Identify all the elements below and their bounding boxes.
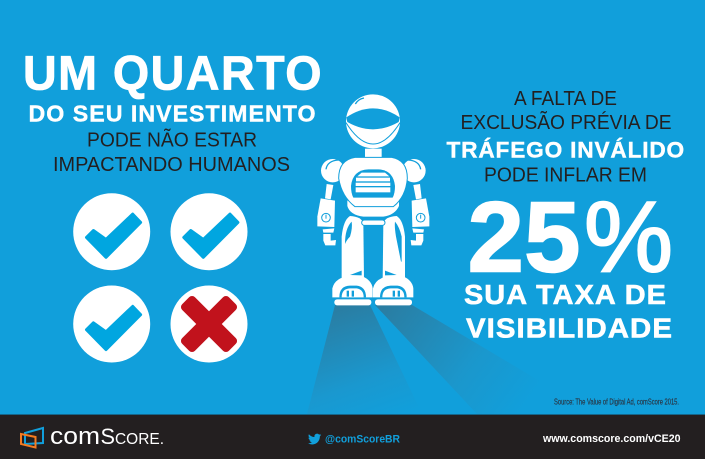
robot illustration <box>317 94 429 305</box>
icon: check 2 <box>170 193 248 270</box>
text: visibilidade: VISIBILIDADE <box>466 313 673 344</box>
website url: www.comscore.com/vCE20 <box>542 433 680 445</box>
twitter handle: @comScoreBR <box>325 434 400 446</box>
big number: 25 percent: % <box>584 182 673 294</box>
icon: check 1 <box>73 193 150 270</box>
icon: red cross <box>170 286 248 362</box>
text: exclusao previa de: EXCLUSÃO PRÉVIA DE <box>460 110 672 134</box>
logo: comscore wordmark: com <box>50 423 100 450</box>
highlight: trafego invalido: TRÁFEGO INVÁLIDO <box>446 138 685 163</box>
text: a falta de: A FALTA DE <box>514 88 617 110</box>
robot right arm <box>402 159 429 245</box>
robot right foot <box>373 276 413 305</box>
robot torso <box>339 157 407 207</box>
logo: comscore wordmark: S <box>100 424 115 449</box>
headline block <box>23 48 323 176</box>
robot left arm <box>317 159 344 245</box>
right text block <box>446 88 685 344</box>
logo: comscore wordmark <box>50 423 164 450</box>
text: impactando humanos: IMPACTANDO HUMANOS <box>53 154 290 176</box>
robot head <box>346 94 400 157</box>
text: pode inflar em: PODE INFLAR EM <box>484 165 647 187</box>
subtitle: do seu investimento: DO SEU INVESTIMENTO <box>28 101 316 127</box>
icon: check 3 <box>73 286 150 362</box>
logo: comscore wordmark: CORE. <box>115 431 164 448</box>
text: pode nao estar: PODE NÃO ESTAR <box>87 128 257 152</box>
robot left foot <box>332 276 373 305</box>
robot shadow beams <box>307 305 595 414</box>
robot pelvis <box>347 201 399 217</box>
icon grid: three checks and one cross <box>73 193 248 362</box>
robot legs <box>342 216 405 280</box>
footer bar <box>0 414 705 459</box>
icon: twitter bird <box>308 434 321 444</box>
big number: 25 percent <box>468 182 673 294</box>
title: um quarto: UM QUARTO <box>23 48 323 100</box>
text: sua taxa de: SUA TAXA DE <box>464 279 667 310</box>
icon: comscore logo mark <box>21 428 43 448</box>
big number: 25 percent: 25 <box>468 182 580 294</box>
